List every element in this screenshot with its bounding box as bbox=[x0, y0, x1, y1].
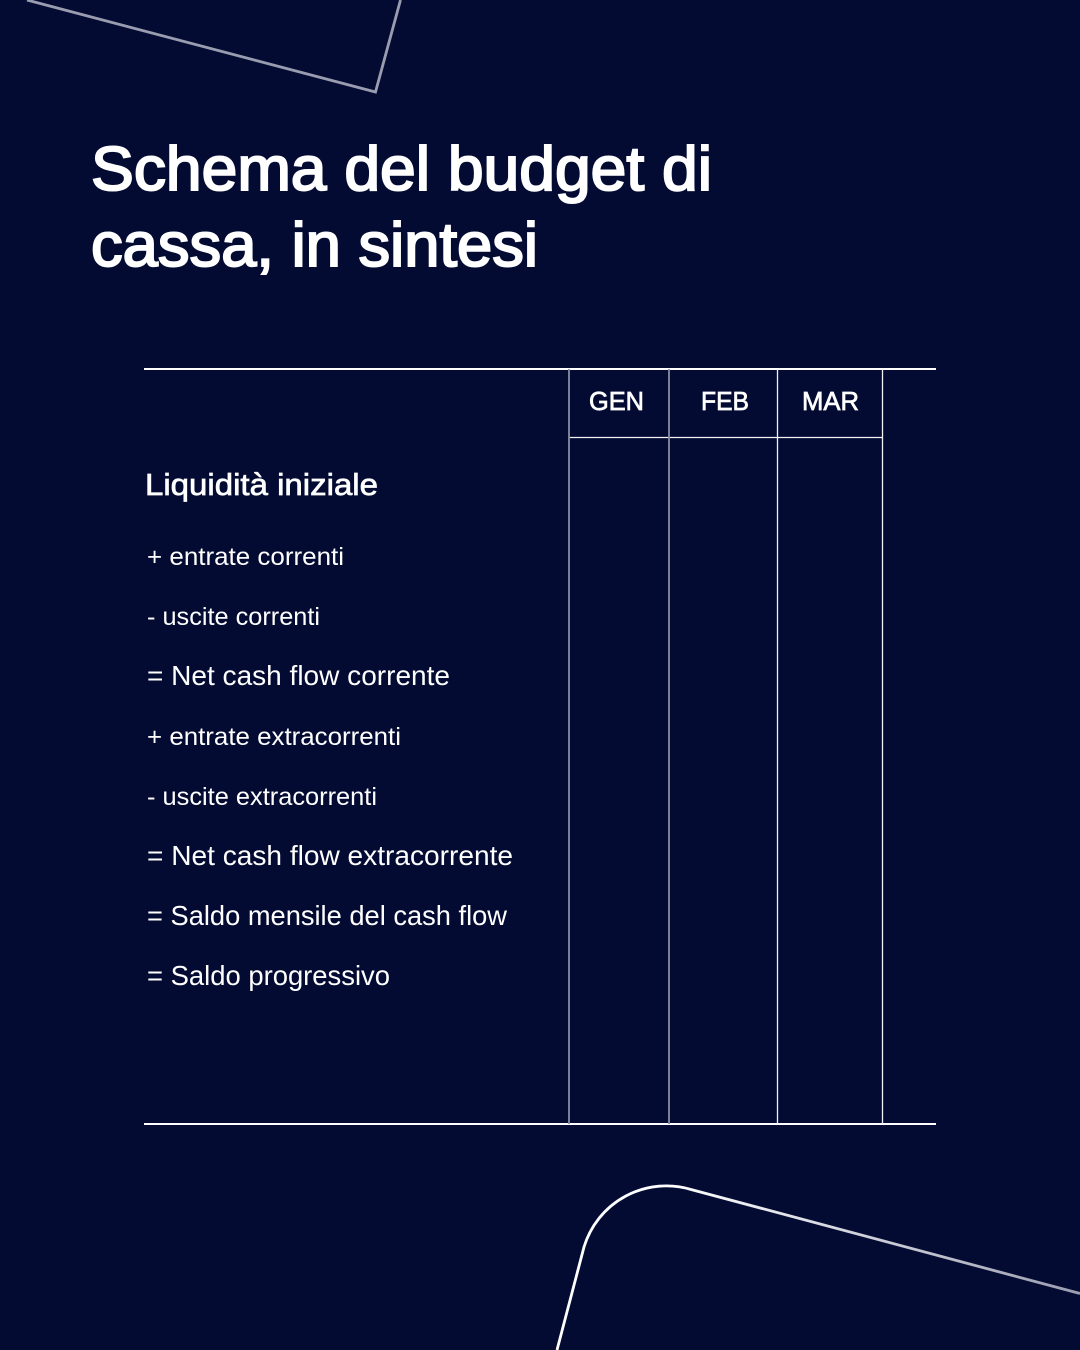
row labels: cash flow items: = Saldo mensile del cash flow bbox=[147, 900, 508, 931]
column headers: MAR bbox=[802, 386, 859, 416]
decoration: bottom rounded shape bbox=[557, 1186, 1080, 1350]
column headers: GEN bbox=[589, 386, 644, 416]
row labels: cash flow items: - uscite correnti bbox=[147, 603, 320, 631]
row labels: cash flow items: + entrate extracorrenti bbox=[147, 723, 401, 751]
row labels: cash flow items: - uscite extracorrenti bbox=[147, 783, 377, 811]
table grid bbox=[144, 369, 936, 1124]
row labels: cash flow items: + entrate correnti bbox=[147, 543, 344, 571]
row labels: cash flow items: = Saldo progressivo bbox=[147, 960, 390, 991]
table bbox=[144, 369, 936, 1124]
title: Schema del budget di bbox=[91, 135, 712, 204]
decoration: top corner shape bbox=[27, 0, 400, 92]
row label: liquidità iniziale: Liquidità iniziale bbox=[145, 467, 378, 502]
column headers bbox=[589, 386, 859, 416]
title bbox=[91, 135, 712, 280]
title: cassa, in sintesi bbox=[91, 211, 538, 280]
column headers: FEB bbox=[701, 386, 749, 416]
row labels: cash flow items: = Net cash flow extracorrente bbox=[147, 840, 513, 871]
row labels: cash flow items bbox=[147, 543, 513, 991]
row labels: cash flow items: = Net cash flow corrente bbox=[147, 660, 450, 691]
